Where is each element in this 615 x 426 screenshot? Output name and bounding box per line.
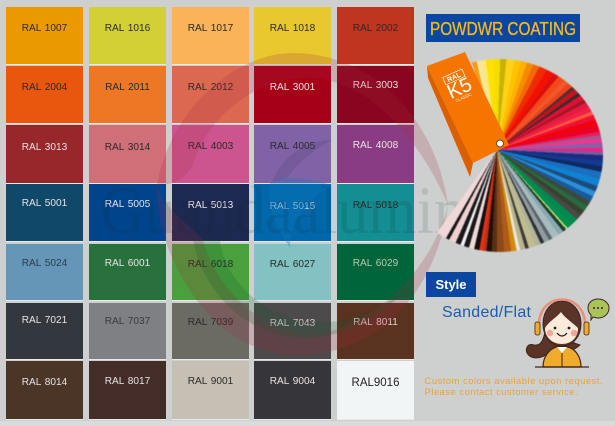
swatch RAL 4008: [337, 125, 414, 183]
watermark logo and text: Guandaaluminum: [100, 172, 544, 248]
style label: Style: [435, 277, 467, 292]
swatch RAL 5013: RAL 5013: [188, 200, 233, 211]
swatch RAL 5015: [254, 184, 331, 241]
swatch RAL 7043: RAL 7043: [270, 318, 315, 329]
orange RAL K5 box: CLASSIC: [455, 92, 472, 103]
swatch RAL 2002: [337, 7, 414, 64]
swatch RAL 1017: RAL 1017: [188, 23, 233, 34]
swatch RAL 3014: [89, 125, 166, 183]
swatch RAL 5024: RAL 5024: [22, 258, 67, 269]
swatch RAL 2004: RAL 2004: [22, 82, 67, 93]
swatch RAL 4005: [254, 125, 331, 183]
swatch RAL 7037: [89, 303, 166, 359]
swatch RAL 9001: [172, 361, 249, 419]
swatch RAL 5005: [89, 184, 166, 241]
swatch RAL 3003: [337, 66, 414, 123]
custom colours note: Custom colors available upon request.: [424, 376, 602, 387]
swatch RAL 6018: [172, 244, 249, 300]
title banner: [426, 14, 580, 42]
swatch RAL 1018: RAL 1018: [270, 23, 315, 34]
swatch RAL 3003: RAL 3003: [353, 80, 398, 91]
swatch RAL 1017: [172, 7, 249, 64]
swatch RAL 5001: RAL 5001: [22, 198, 67, 209]
swatch RAL 7039: RAL 7039: [188, 317, 233, 328]
swatch RAL 5005: RAL 5005: [105, 199, 150, 210]
swatch RAL 3001: RAL 3001: [270, 82, 315, 93]
swatch RAL 2011: [89, 66, 166, 123]
bottom strip: [0, 421, 615, 426]
swatch RAL 5018: [337, 184, 414, 241]
swatch RAL 2011: RAL 2011: [105, 82, 150, 93]
swatch RAL 8017: [89, 361, 166, 419]
swatch RAL 6027: RAL 6027: [270, 259, 315, 270]
custom colours note: Please contact customer service.: [424, 387, 578, 398]
swatch RAL 8014: [6, 361, 83, 419]
style label: [426, 272, 476, 297]
swatch RAL 3013: RAL 3013: [22, 142, 67, 153]
swatch RAL 7043: [254, 303, 331, 359]
swatch RAL 5015: RAL 5015: [270, 201, 315, 212]
swatch RAL 9016: [337, 361, 414, 419]
swatch RAL 5013: [172, 184, 249, 241]
fan of RAL colour cards: [396, 59, 603, 252]
orange RAL K5 box: [427, 52, 509, 177]
swatch RAL 7037: RAL 7037: [105, 316, 150, 327]
swatch RAL 8017: RAL 8017: [105, 376, 150, 387]
swatch RAL 3001: [254, 66, 331, 123]
custom colours note: [424, 376, 602, 398]
swatch RAL 3014: RAL 3014: [105, 142, 150, 153]
swatch RAL 7039: [172, 303, 249, 359]
swatch RAL 4003: [172, 125, 249, 183]
swatch RAL 1007: [6, 7, 83, 64]
swatch RAL 7021: RAL 7021: [22, 315, 67, 326]
icon: speech bubble: [588, 299, 609, 320]
swatch RAL 5018: RAL 5018: [353, 200, 398, 211]
swatch RAL 1007: RAL 1007: [22, 23, 67, 34]
swatch RAL 3013: [6, 125, 83, 183]
swatch RAL 6029: RAL 6029: [353, 258, 398, 269]
watermark logo and text: [100, 53, 544, 355]
swatch RAL 6027: [254, 244, 331, 300]
swatch RAL 4008: RAL 4008: [353, 140, 398, 151]
orange RAL K5 box: K5: [444, 74, 475, 104]
swatch RAL 2012: [172, 66, 249, 123]
swatch RAL 1016: RAL 1016: [105, 23, 150, 34]
swatch RAL 2004: [6, 66, 83, 123]
swatch RAL 5001: [6, 184, 83, 241]
style value: Sanded/Flat: [442, 304, 532, 321]
panel: colour swatch grid: [6, 7, 414, 420]
swatch RAL 6018: RAL 6018: [188, 259, 233, 270]
swatch RAL 6001: RAL 6001: [105, 258, 150, 269]
swatch RAL 9016: RAL9016: [352, 377, 399, 389]
swatch RAL 6029: [337, 244, 414, 300]
swatch RAL 9001: RAL 9001: [188, 376, 233, 387]
swatch RAL 9004: RAL 9004: [270, 376, 315, 387]
swatch RAL 2012: RAL 2012: [188, 82, 233, 93]
swatch RAL 1018: [254, 7, 331, 64]
swatch RAL 4005: RAL 4005: [270, 141, 315, 152]
orange RAL K5 box: RAL: [446, 71, 463, 84]
swatch RAL 8014: RAL 8014: [22, 377, 67, 388]
swatch RAL 4003: RAL 4003: [188, 141, 233, 152]
swatch RAL 8011: RAL 8011: [353, 317, 398, 328]
swatch RAL 2002: RAL 2002: [353, 23, 398, 34]
swatch RAL 8011: [337, 303, 414, 359]
swatch RAL 7021: [6, 303, 83, 359]
title banner: POWDWR COATING: [430, 18, 576, 39]
swatch RAL 5024: [6, 244, 83, 300]
swatch RAL 1016: [89, 7, 166, 64]
icon: customer service girl: [526, 300, 589, 367]
swatch RAL 9004: [254, 361, 331, 419]
swatch RAL 6001: [89, 244, 166, 300]
